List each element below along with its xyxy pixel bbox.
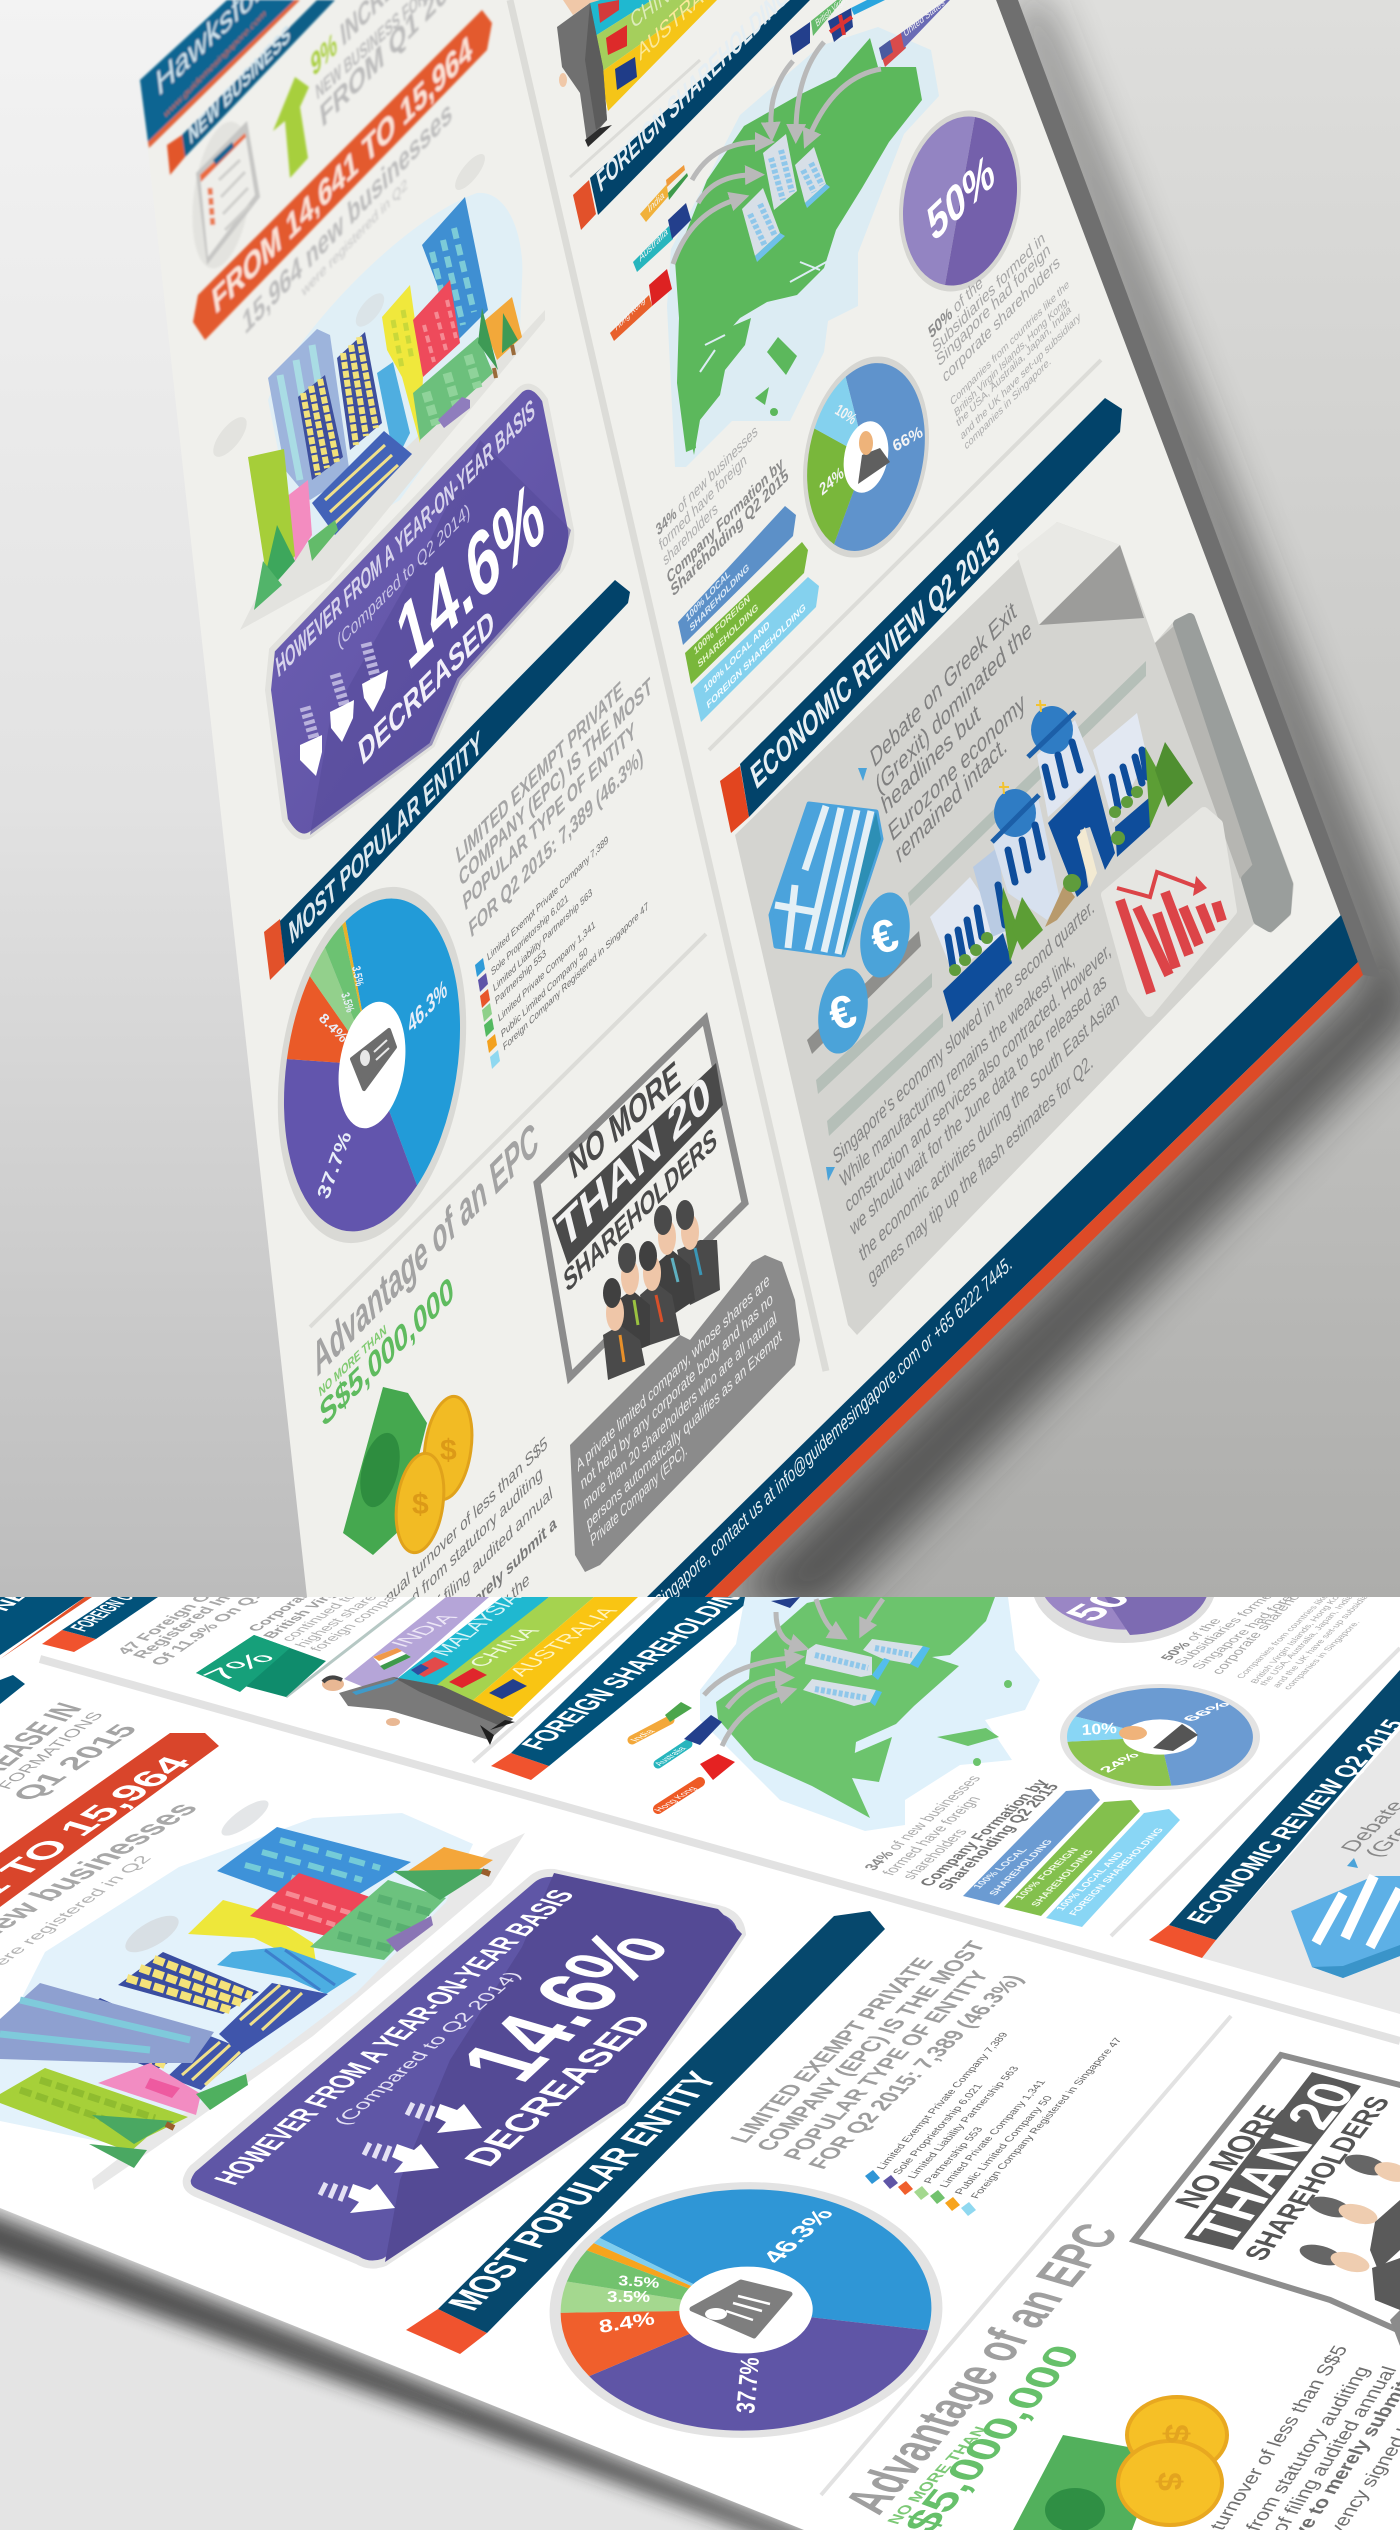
stat: S$5,000,000: NO MORE THAN (318, 1321, 388, 1400)
footer blue band (647, 915, 1358, 1597)
text: Greek exit debate: Eurozone economy (886, 688, 1028, 848)
illustration: Greek buildings (930, 700, 1193, 1022)
callout corner (cropped) (1390, 2310, 1400, 2346)
stat: S$5,000,000: S$5,000,000 (317, 1268, 457, 1436)
column dividers (310, 0, 1101, 1371)
legend: entity types: Foreign Company Registered in Singapore 47 (969, 2037, 1125, 2200)
text: EPC advantage paragraph: million is exempted from statutory auditing (315, 1462, 544, 1703)
panel: 14.6% decreased: 14.6% (388, 460, 553, 689)
panel: economic review scroll (735, 522, 1294, 1335)
callout: private limited company definition: not held by any corporate body and has no (579, 1290, 774, 1494)
foreign investment arrows (673, 42, 881, 264)
text: Singapore economy summary (826, 895, 1122, 1290)
icon: money and coins (1013, 2397, 1227, 2530)
poster paper (140, 0, 1358, 1597)
panel: 14.6% decreased: (Compared to Q2 2014) (330, 1970, 526, 2127)
text: Greek exit debate: (Grexit) dominated the (873, 614, 1035, 801)
legend: entity types: Partnership 553 (494, 947, 547, 1008)
stat box: 7%: 7% (194, 1649, 283, 1684)
icon: five shareholders (603, 1200, 720, 1380)
text: corporate shareholders from BVI: British Virgin Islands (260, 1550, 398, 1640)
heading: increase in formations (cropped): Q1 2015 (5, 1721, 145, 1804)
text: 50% of subsidiaries (1157, 1571, 1325, 1676)
panel: no more than 20 shareholders: NO MORE (1167, 2102, 1294, 2212)
icon: money and coins: $ (412, 1488, 429, 1521)
text: EPC advantage paragraph: accounts, they have to merely submit a (329, 1512, 558, 1753)
text: Greek exit debate (858, 596, 1035, 870)
stat: 50% circle (cropped): 50% (1054, 1566, 1176, 1626)
text: corporate shareholders from BVI: highest share of (292, 1583, 396, 1649)
flag tags: investor countries: Hong Kong (614, 293, 646, 334)
illustration: city skyline (207, 150, 545, 630)
legend: entity types: Limited Exempt Private Company 7,389 (874, 2031, 1011, 2171)
text: limited exempt private company: POPULAR TYPE OF ENTITY (461, 716, 638, 916)
icon: falling bar chart card (1106, 812, 1232, 1012)
pie labels: 46.3% (406, 974, 449, 1040)
arrow: 100% foreign shareholding: 100% FOREIGN (1013, 1847, 1082, 1901)
section band: most popular entity (264, 580, 630, 980)
text: 47 foreign companies: 47 Foreign Companies (113, 1547, 280, 1656)
pie chart: popular entity types (528, 2170, 964, 2450)
illustration: city skyline (0, 1795, 525, 2190)
arrow: 100% local shareholding: 100% LOCAL (971, 1847, 1030, 1890)
legend: entity types: Public Limited Company 50 (500, 945, 589, 1041)
arrow: 100% local and foreign shareholding: FOREIGN SHAREHOLDING (706, 601, 807, 712)
footer contact text: Singapore, contact us at info@guidemesingapore.com or +65 6222 7445. (652, 1251, 1015, 1617)
donut chart: shareholding 66/24/10: 24% (818, 464, 846, 500)
panel: economic review background (1202, 1730, 1400, 2014)
section band: new business: NEW BUSINESS (187, 18, 291, 150)
orange banner: from 14,641 to 15,964: FROM 14,641 TO 15,964 (210, 27, 474, 323)
text: 34% of new businesses: formed have foreign (880, 1795, 985, 1877)
callout: private limited company definition: A private limited company, whose shares are (575, 1271, 771, 1476)
legend: entity types: Foreign Company Registered in Singapore 47 (502, 900, 650, 1054)
poster drop shadow (0, 2205, 830, 2530)
text: countries list (1234, 1583, 1376, 1691)
section band: most popular entity (406, 1911, 885, 2354)
legend: entity types: Limited Liability Partnership 563 (905, 2065, 1022, 2180)
text: corporate shareholders from BVI: foreign companies (307, 1579, 423, 1653)
text: 50% of subsidiaries: corporate shareholders (941, 253, 1062, 387)
pie labels: 3.5% (618, 2272, 661, 2291)
footer orange band (705, 962, 1363, 1597)
callout: private limited company definition: Private Company (EPC). (589, 1440, 688, 1551)
text: corporate shareholders from BVI: continued to be the (278, 1566, 398, 1643)
pie labels (597, 2206, 840, 2415)
donut chart: shareholding 66/24/10 (787, 346, 945, 568)
flag stripes: country ribbons: AUSTRALIA (503, 1605, 623, 1678)
legend: entity types: Sole Proprietorship 6,021 (891, 2083, 986, 2176)
pie labels: 3.5% (607, 2289, 650, 2306)
pie labels: 8.4% (597, 2308, 656, 2337)
section band: foreign companies (cropped) (42, 1558, 187, 1652)
arrow: 100% local shareholding: SHAREHOLDING (689, 562, 750, 635)
pie labels (313, 965, 449, 1201)
callout: private limited company definition: persons automatically qualifies as an Exempt (585, 1327, 783, 1534)
donut chart: shareholding 66/24/10: 10% (832, 402, 859, 428)
donut chart: shareholding 66/24/10: 24% (1096, 1751, 1144, 1774)
text: 50% of subsidiaries: Subsidiaries formed in (931, 229, 1047, 358)
icon: money and coins: $ (1150, 2472, 1188, 2491)
text: Singapore economy summary: Singapore's economy slowed in the second quarter. (831, 895, 1097, 1170)
legend: entity types: Limited Private Company 1,341 (497, 919, 596, 1025)
lower photo: poster close-up (0, 1518, 1400, 2530)
legend: entity types: Partnership 553 (922, 2126, 986, 2185)
orange banner: to 15,964 (0, 1733, 219, 1907)
text: EPC advantage paragraph (386, 1436, 557, 1597)
section band: foreign shareholding (491, 1580, 761, 1780)
text: countries list: Companies from countries like the (1234, 1583, 1342, 1680)
text: countries list: British Virgin Islands, Hong Kong, (953, 294, 1070, 420)
icon: money and coins: $ (440, 1434, 457, 1467)
pie labels: 3.5% (349, 965, 367, 987)
header: Hawksford logo band (140, 0, 300, 148)
legend: entity types (865, 2031, 1125, 2216)
legend: entity types: Public Limited Company 50 (952, 2095, 1056, 2196)
flag tags: investor countries: India (628, 1729, 658, 1743)
stat: 50% circle (cropped) (1032, 1527, 1216, 1643)
buildings on map (742, 134, 830, 262)
panel: 14.6% decreased (187, 1873, 742, 2265)
panel: 14.6% decreased: HOWEVER FROM A YEAR-ON-YEAR BASIS (274, 392, 537, 684)
text: 34% of new businesses: shareholders (661, 499, 719, 570)
stat: 50% circle: 50% (922, 142, 999, 253)
icon: company card (352, 1030, 395, 1089)
panel: no more than 20 shareholders (1134, 2055, 1400, 2340)
text: countries list: the USA, Australia, Japan, India (1257, 1594, 1356, 1687)
icon: checklist clipboard (193, 121, 260, 268)
legend: entity types: Limited Liability Partnership 563 (492, 887, 594, 995)
text: Singapore economy summary: While manufacturing remains the weakest link, (838, 947, 1077, 1193)
icon: money and coins (343, 1387, 478, 1556)
section band: foreign companies (cropped): FOREIGN COMPANIES (65, 1558, 187, 1633)
icon: shareholder person (858, 448, 890, 484)
callout: private limited company definition (570, 1255, 800, 1572)
flag tags: investor countries (610, 0, 950, 341)
icon: money and coins: $ (1157, 2424, 1195, 2443)
flag tags: investor countries: Australia (652, 1746, 690, 1767)
text: Singapore economy summary: we should wait for the June data to be released as (847, 969, 1109, 1241)
text: limited exempt private company: LIMITED EXEMPT PRIVATE (454, 675, 625, 869)
pie labels: 37.7% (313, 1129, 356, 1201)
text: Singapore economy summary: construction and services also contracted. However, (843, 938, 1113, 1218)
icon: green arrow tip (cropped) (0, 1675, 25, 1704)
icon: euro coins: € (822, 984, 862, 1041)
flag stripes: top country ribbons (588, 0, 729, 111)
arrow: 100% local and foreign shareholding: 100% LOCAL AND (703, 619, 771, 696)
heading: company formation by shareholding: Company Formation by (916, 1777, 1052, 1888)
panel: 14.6% decreased (268, 387, 571, 837)
text: 50% of subsidiaries: 50% of the (927, 273, 985, 343)
text: limited exempt private company: POPULAR TYPE OF ENTITY (778, 1968, 996, 2163)
pie labels: 46.3% (755, 2206, 840, 2266)
text: countries list: British Virgin Islands, Hong Kong, (1248, 1586, 1350, 1685)
text: 47 foreign companies: Registered In Q2, An Increase (129, 1518, 344, 1660)
pie labels: 3.5% (338, 991, 358, 1014)
pie labels: 37.7% (730, 2356, 765, 2415)
arrow: 100% local and foreign shareholding (1046, 1809, 1180, 1927)
text: 47 foreign companies: Of 11.9% On Q1 (147, 1590, 269, 1667)
text: countries list: companies in Singapore. (963, 355, 1052, 453)
icon: euro coins (812, 888, 916, 1058)
icon: shareholder person (1119, 1726, 1147, 1740)
panel: no more than 20 shareholders: THAN 20 (1181, 2076, 1369, 2250)
foreign investment arrows (704, 1599, 883, 1746)
panel: 14.6% decreased: DECREASED (355, 601, 497, 773)
section band: new business (cropped) (0, 1588, 92, 1659)
flag tags: investor countries (628, 1597, 800, 1813)
text: countries list: Companies from countries like the (949, 278, 1071, 409)
donut chart: shareholding 66/24/10 (1060, 1684, 1260, 1790)
panel: no more than 20 shareholders: THAN 20 (553, 1063, 715, 1261)
icon: Greek flag (771, 804, 881, 955)
arrow: 100% local shareholding: SHAREHOLDING (987, 1838, 1056, 1897)
text: EPC advantage paragraph: statement of solvency signed by the (335, 1568, 531, 1776)
text: countries list: and the UK have set-up subsidiary (1270, 1588, 1376, 1689)
donut chart: shareholding 66/24/10: 66% (891, 424, 925, 456)
flag stripes: country ribbons: INDIA (385, 1611, 463, 1649)
text: limited exempt private company: FOR Q2 2015: 7,389 (46.3%) (803, 1972, 1030, 2172)
arrow: 100% foreign shareholding: 100% FOREIGN (693, 593, 751, 658)
text: countries list: companies in Singapore. (1281, 1620, 1362, 1691)
panel: no more than 20 shareholders (537, 1019, 745, 1380)
arrow: 100% local and foreign shareholding: 100% LOCAL AND (1054, 1851, 1127, 1912)
text: 50% of subsidiaries: corporate shareholders (1208, 1571, 1325, 1676)
heading: advantage of an EPC: Advantage of an EPC (830, 2217, 1131, 2519)
heading: company formation by shareholding: Company Formation by (665, 454, 785, 588)
callout: private limited company definition: more than 20 shareholders who are all natural (582, 1309, 778, 1514)
legend: entity types (475, 834, 650, 1069)
arrow: 100% local shareholding (678, 506, 796, 645)
arrow: 100% local and foreign shareholding: FOREIGN SHAREHOLDING (1067, 1827, 1167, 1917)
heading: advantage of an EPC: Advantage of an EPC (309, 1112, 542, 1387)
flag stripes: country ribbons: CHINA (463, 1625, 545, 1669)
text: limited exempt private company: FOR Q2 2015: 7,389 (46.3%) (467, 742, 645, 943)
pie labels: 8.4% (316, 1010, 352, 1046)
stat: 50% circle (885, 101, 1035, 301)
stat: S$5,000,000: NO MORE THAN (885, 2425, 991, 2526)
arrow: 100% local shareholding: 100% LOCAL (685, 567, 732, 625)
text: countries list: and the UK have set-up subsidiary (959, 311, 1083, 443)
wall background (0, 0, 307, 1597)
arrow: 100% local and foreign shareholding (693, 577, 819, 722)
arrow: 100% foreign shareholding: SHAREHOLDING (697, 602, 759, 671)
stat box: 7% (194, 1635, 326, 1697)
text: Greek exit debate: remained intact. (893, 730, 1010, 870)
map: Singapore with foreign shareholder arrows (700, 1597, 1040, 1831)
icon: three down arrows (300, 643, 388, 776)
text: 50% of subsidiaries: Subsidiaries formed in (1170, 1578, 1294, 1667)
arrow: 100% foreign shareholding (1004, 1800, 1140, 1916)
text: 50% of subsidiaries: Singapore had foreign (1188, 1582, 1312, 1671)
poster cast shadow (728, 0, 1400, 1620)
icon: three down arrows (320, 2103, 482, 2213)
text: Greek exit debate: headlines but (879, 699, 983, 821)
icon: businessman (322, 1677, 515, 1745)
icon: shareholders (1297, 2151, 1400, 2310)
legend: entity types: Limited Private Company 1,341 (938, 2079, 1049, 2189)
panel: no more than 20 shareholders: NO MORE (565, 1052, 684, 1188)
icon: company card (692, 2282, 790, 2336)
text: new businesses registered: were registered in Q2 (300, 175, 409, 301)
text: EPC advantage paragraph: is with an annual turnover of less than S$5 (318, 1432, 549, 1675)
map: Singapore with foreign shareholder arrows (667, 27, 939, 467)
text: EPC advantage paragraph: Instead of filing audited annual (386, 1482, 554, 1662)
arrow: 100% local shareholding (963, 1789, 1100, 1905)
heading: company formation by shareholding: Shareholding Q2 2015 (669, 466, 790, 601)
text: limited exempt private company: LIMITED EXEMPT PRIVATE (725, 1955, 940, 2146)
poster paper (0, 1597, 1400, 2530)
section band: economic review (720, 398, 1122, 833)
text: 50% of subsidiaries: 50% of the (1157, 1616, 1225, 1662)
section band: foreign shareholding (573, 0, 810, 230)
icon: green up arrow (273, 77, 309, 178)
text: Greek exit debate: Debate on Greek Exit (868, 596, 1019, 774)
flag tags: investor countries: Hong Kong (652, 1786, 700, 1813)
text: limited exempt private company: COMPANY (EPC) IS THE MOST (751, 1938, 992, 2154)
section band: economic review: ECONOMIC REVIEW Q2 2015 (747, 521, 1003, 797)
flag tags: investor countries: Australia (638, 225, 669, 265)
text: 34% of new businesses: shareholders (900, 1828, 971, 1881)
text: Singapore economy summary: the economic activities during the South East Asian (857, 988, 1122, 1267)
flag tags: investor countries: India (647, 189, 665, 216)
text: 34% of new businesses: formed have foreign (657, 451, 748, 555)
text: limited exempt private company: COMPANY (EPC) IS THE MOST (457, 671, 654, 892)
upper photo: poster leaning on wall (0, 0, 1400, 1597)
text: 50% of subsidiaries: Singapore had foreign (935, 241, 1052, 371)
flag stripes: country ribbons: MALAYSIA (427, 1591, 527, 1658)
text: corporate shareholders from BVI: Corporate (245, 1588, 320, 1633)
arrow: 100% foreign shareholding (685, 542, 808, 684)
panel: no more than 20 shareholders: SHAREHOLDERS (561, 1121, 720, 1300)
poster side thickness (996, 0, 1381, 978)
section band: most popular entity: MOST POPULAR ENTITY (439, 2067, 728, 2315)
text: Singapore economy summary: games may tip up the flash estimates for Q2. (866, 1050, 1095, 1290)
panel: 14.6% decreased: DECREASED (455, 2011, 663, 2171)
buildings on map (803, 1639, 930, 1706)
panel: 14.6% decreased: 14.6% (436, 1921, 693, 2091)
section band: foreign shareholding: FOREIGN SHAREHOLDING (515, 1580, 761, 1753)
dividers (40, 1597, 1400, 2495)
text: countries list: the USA, Australia, Japan, India (955, 304, 1073, 430)
text: countries list (949, 278, 1083, 453)
panel: 14.6% decreased: (Compared to Q2 2014) (336, 499, 472, 654)
text: new businesses registered: 15,964 new businesses (241, 93, 454, 342)
flag stripes: country ribbons (344, 1591, 638, 1717)
section band: most popular entity: MOST POPULAR ENTITY (287, 724, 484, 952)
panel: 14.6% decreased: HOWEVER FROM A YEAR-ON-YEAR BASIS (206, 1886, 582, 2188)
text: 34% of new businesses: 34% of new businesses (654, 421, 759, 540)
section band: new business (167, 0, 335, 175)
pie chart: popular entity types (278, 887, 466, 1243)
surface background (0, 1597, 1400, 2530)
wall right side tone (728, 0, 1400, 1597)
text: 34% of new businesses: 34% of new businesses (862, 1774, 985, 1872)
icon: businessman (557, 0, 612, 147)
donut chart: shareholding 66/24/10: 10% (1081, 1720, 1117, 1739)
legend: entity types: Limited Exempt Private Company 7,389 (486, 834, 610, 964)
heading: company formation by shareholding: Shareholding Q2 2015 (934, 1782, 1063, 1892)
text: corporate shareholders from BVI (245, 1550, 423, 1653)
arrow: 100% foreign shareholding: SHAREHOLDING (1029, 1849, 1097, 1908)
legend: entity types: Sole Proprietorship 6,021 (490, 892, 570, 979)
icon: Greek flag (cropped) (1291, 1876, 1400, 1978)
icon: euro coins: € (864, 908, 904, 965)
donut chart: shareholding 66/24/10: 66% (1179, 1700, 1235, 1723)
header: Hawksford logo band: www.guidemesingapore.com (163, 7, 266, 121)
